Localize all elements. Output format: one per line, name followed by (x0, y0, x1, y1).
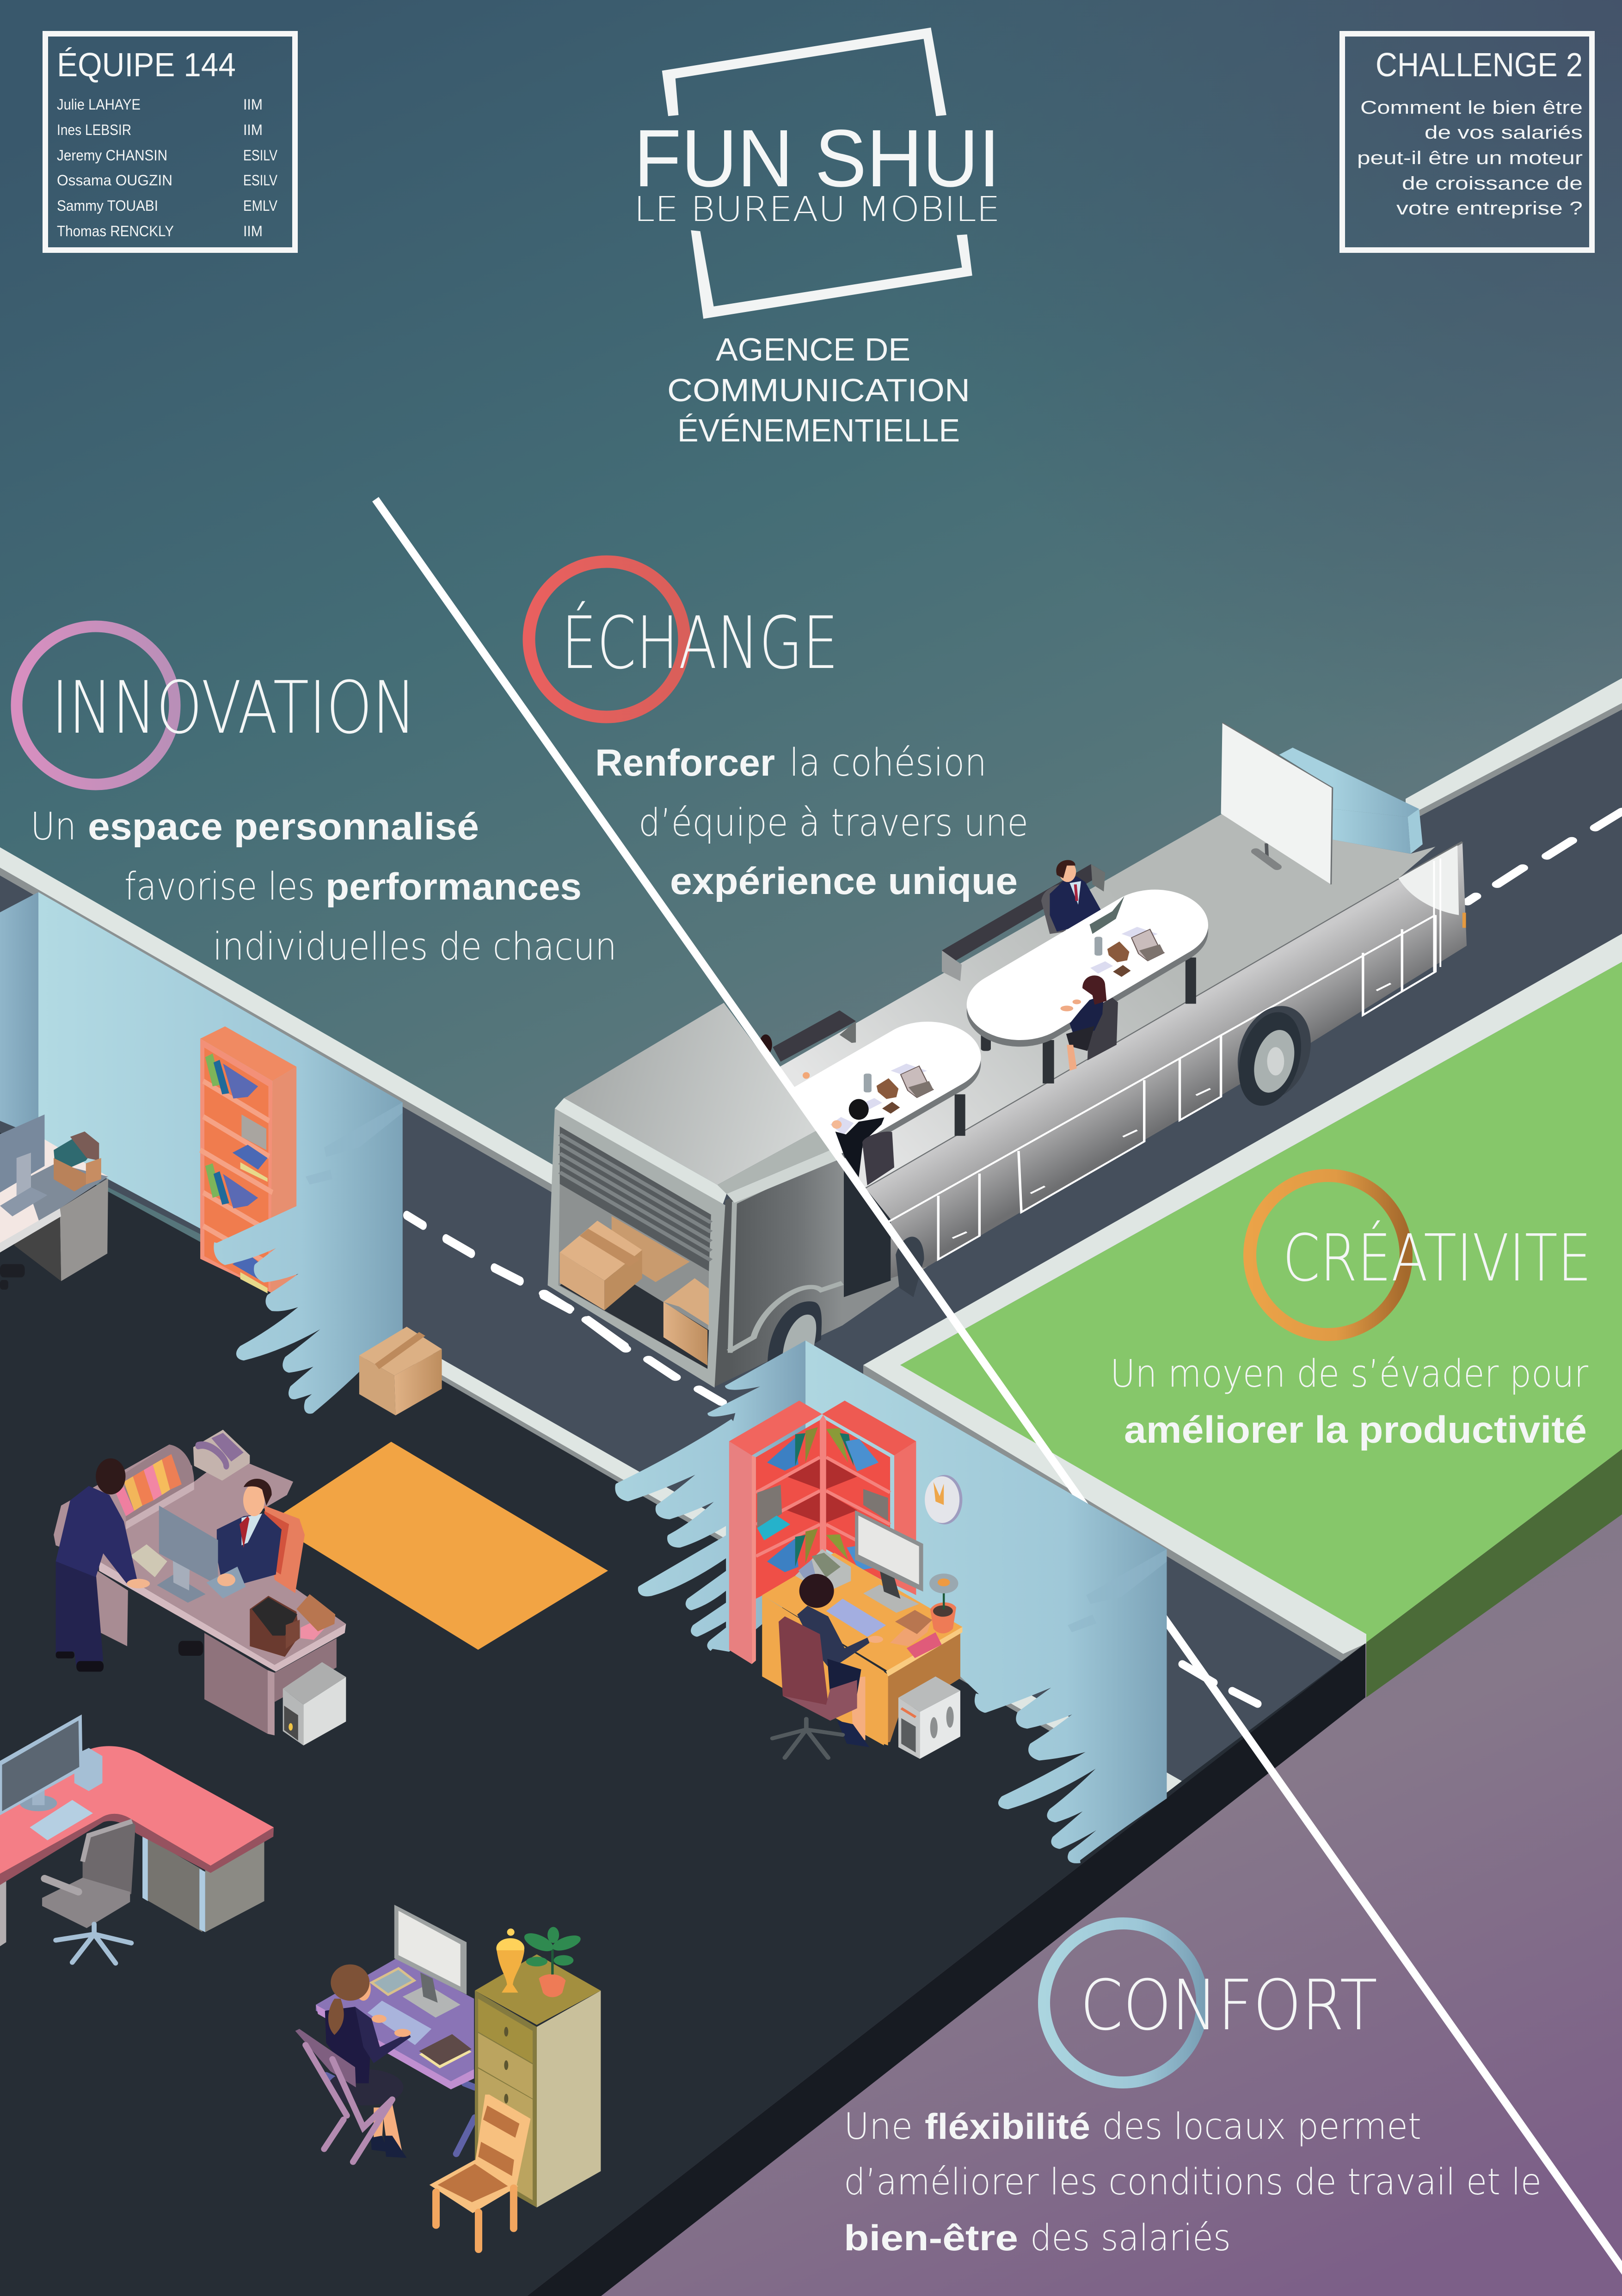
road dashes (407, 811, 1622, 1704)
whiteboard (1221, 722, 1333, 884)
desk pedestal (0, 1836, 264, 1946)
text: creativite: améliorer la productivité (1124, 1409, 1587, 1451)
keyboard (368, 2001, 431, 2045)
standing man (56, 1458, 150, 1671)
text: confort: bien-être (844, 2217, 1018, 2258)
text: innovation: performances (326, 866, 582, 908)
wall left return with drips (618, 1341, 805, 1652)
whiteboard stand (1256, 843, 1277, 867)
benches (759, 864, 1105, 1079)
desk top (0, 1139, 108, 1246)
desk top (316, 1959, 474, 2083)
text: confort: des salariés (1030, 2217, 1231, 2259)
orange desk (762, 1553, 962, 1745)
books (890, 1610, 942, 1658)
desk legs (95, 1569, 337, 1735)
binder box (54, 1132, 101, 1191)
box on the floor (359, 1327, 442, 1415)
bus side rim (865, 842, 1462, 1188)
carpet (270, 1442, 608, 1650)
whiteboard and blue panel (1221, 722, 1423, 884)
text: echange: expérience unique (670, 860, 1018, 902)
laptop on the large table (1089, 896, 1124, 934)
challenge question (1357, 98, 1583, 219)
text: innovation (31, 805, 617, 969)
ring: innovation (17, 626, 175, 784)
text: confort: d’améliorer les conditions de travail et le (844, 2161, 1542, 2203)
desk legs (326, 2075, 475, 2154)
challenge question: de croissance de (1402, 173, 1583, 194)
bus side panel (865, 842, 1467, 1278)
notebook (419, 2034, 472, 2069)
blue roof panel (1279, 747, 1423, 854)
wall surface with drips (805, 1341, 1167, 1861)
woman at purple desk (325, 1965, 411, 2158)
kerb: upper left (0, 847, 647, 1247)
binder box (250, 1596, 300, 1657)
feet (0, 1264, 25, 1290)
bus compartment lines (889, 915, 1435, 1259)
team list: ESILV (243, 172, 278, 189)
text: echange: la cohésion (789, 741, 987, 785)
block: confort (844, 1923, 1542, 2259)
logo name: FUN SHUI (634, 113, 1000, 204)
title: confort: CONFORT (1080, 1965, 1377, 2046)
block: creativite (1110, 1176, 1591, 1451)
orange office chair (264, 1506, 305, 1593)
desk top (0, 1746, 274, 1874)
team list (57, 96, 278, 239)
desk edge (0, 1814, 274, 1885)
wall drips (216, 1102, 403, 1410)
road surface (0, 707, 1622, 1785)
team list: Ossama OUGZIN (57, 172, 172, 189)
wall column (0, 892, 38, 1137)
phone (795, 1549, 851, 1593)
small table (793, 1057, 928, 1141)
heading: team: ÉQUIPE 144 (57, 47, 236, 84)
team list: Ines LEBSIR (57, 122, 131, 138)
desk pedestal (60, 1178, 108, 1281)
kerb: upper right (1406, 678, 1622, 824)
wall shading (306, 1102, 403, 1185)
woman at orange desk (797, 1574, 883, 1747)
text: creativite (1110, 1352, 1588, 1451)
wall surface (38, 892, 403, 1333)
bus rear frame (547, 1108, 725, 1388)
trophy (496, 1929, 524, 1993)
boxes in bus (560, 1216, 709, 1365)
bus rear shutter (560, 1127, 711, 1271)
ring: echange (529, 562, 684, 717)
hand on keyboard (217, 1574, 235, 1586)
logo: Fun Shui (634, 28, 1000, 319)
lawn side (1366, 1449, 1622, 1697)
phone (193, 1430, 250, 1481)
panel: team box (45, 34, 295, 250)
tower (283, 1662, 346, 1745)
lawn kerb (863, 934, 1622, 1654)
block: innovation (17, 626, 617, 969)
team list: EMLV (243, 197, 278, 214)
challenge question: de vos salariés (1425, 122, 1583, 143)
wall shading (1068, 1549, 1167, 1632)
monitor (157, 1506, 246, 1603)
team list: Sammy TOUABI (57, 197, 158, 214)
logo tagline: LE BUREAU MOBILE (634, 190, 1000, 229)
white diagonal divider (375, 499, 1622, 2296)
kerb: lower road (403, 1337, 1182, 1798)
document (130, 1544, 167, 1577)
open interior clipped by the white line (759, 814, 1435, 1188)
tablet (372, 1968, 414, 1995)
agency subtitle (667, 331, 970, 448)
desk top (54, 1445, 346, 1665)
bus cargo interior (559, 1184, 709, 1369)
bus roof (564, 1003, 818, 1185)
lawn (863, 934, 1622, 1697)
computer tower (74, 1748, 102, 1791)
bus floor (773, 814, 1435, 1188)
ring: confort (1044, 1923, 1202, 2082)
folding chair (295, 2029, 392, 2162)
bus front wheels (768, 1237, 924, 1372)
text: innovation: Un (31, 805, 76, 849)
books (296, 1594, 335, 1640)
woman seated (1060, 975, 1118, 1071)
challenge question: peut-il être un moteur (1357, 148, 1583, 168)
block: echange (529, 562, 1028, 902)
text: confort: Une (844, 2106, 913, 2148)
table legs (955, 957, 1196, 1136)
bus rear wheel (1229, 1003, 1319, 1108)
text: confort: des locaux permet (1102, 2106, 1421, 2148)
team list: IIM (243, 96, 263, 113)
bus windscreen (1399, 845, 1459, 915)
keyboard (30, 1800, 93, 1840)
team list: Thomas RENCKLY (57, 223, 174, 239)
bus front cab side (714, 1144, 928, 1387)
floor edge (527, 1643, 1365, 2296)
heading: challenge: CHALLENGE 2 (1376, 47, 1583, 84)
agency subtitle: COMMUNICATION (667, 372, 970, 408)
text: confort: fléxibilité (925, 2106, 1090, 2147)
wooden chair (430, 2094, 531, 2249)
left desk with monitor (0, 1114, 108, 1290)
title: echange: ÉCHANGE (561, 600, 838, 685)
agency subtitle: AGENCE DE (716, 331, 910, 367)
bus roof rim (555, 1098, 842, 1207)
challenge question: votre entreprise ? (1396, 198, 1583, 219)
text: echange (595, 741, 1028, 902)
challenge question: Comment le bien être (1360, 98, 1583, 118)
title: innovation: INNOVATION (51, 666, 416, 750)
man seated at the large table (1041, 860, 1104, 934)
purple desk and worker (295, 1905, 601, 2249)
side wall: left (0, 892, 403, 1410)
logo frame (662, 28, 972, 319)
text: innovation: espace personnalisé (88, 806, 479, 848)
text: echange: Renforcer (595, 742, 775, 784)
text: innovation: individuelles de chacun (213, 925, 617, 969)
text: innovation: favorise les (124, 865, 315, 909)
seated man (217, 1479, 282, 1585)
monitor (855, 1510, 923, 1613)
desk shelf with binders (116, 1445, 194, 1530)
documents on the small table (860, 1064, 934, 1114)
team list: IIM (243, 122, 263, 138)
man writing (830, 1099, 894, 1185)
orange bookshelf (200, 1026, 296, 1296)
bus door (844, 1169, 891, 1297)
floor (0, 1133, 1365, 2296)
red corner bookshelf (729, 1401, 916, 1664)
tower (898, 1677, 960, 1759)
bus (547, 814, 1467, 1388)
potted plant (522, 1927, 583, 1997)
monitor (0, 1114, 44, 1193)
agency subtitle: ÉVÉNEMENTIELLE (677, 412, 960, 448)
pink corner desk (0, 1714, 274, 1963)
seated man's feet (178, 1641, 203, 1656)
mauve reception desk (54, 1430, 346, 1745)
team list: ESILV (243, 147, 278, 164)
text: confort (844, 2106, 1542, 2259)
large table (1020, 925, 1155, 1011)
panel: challenge box (1342, 34, 1592, 250)
grey chair (42, 1821, 135, 1963)
team list: Julie LAHAYE (57, 96, 141, 113)
team list: Jeremy CHANSIN (57, 147, 167, 164)
documents on the large table (1090, 927, 1164, 977)
wall clock (925, 1475, 962, 1525)
maroon office chair (773, 1616, 857, 1758)
monitor (394, 1905, 467, 2018)
filing cabinet (475, 1954, 601, 2207)
keyboard (826, 1598, 886, 1637)
text: echange: d’équipe à travers une (639, 801, 1028, 845)
monitor (0, 1714, 83, 1815)
ring: creativite (1250, 1176, 1406, 1335)
flower pot (929, 1574, 958, 1634)
team list: IIM (243, 223, 263, 239)
side wall: right with desk (618, 1341, 1167, 1861)
